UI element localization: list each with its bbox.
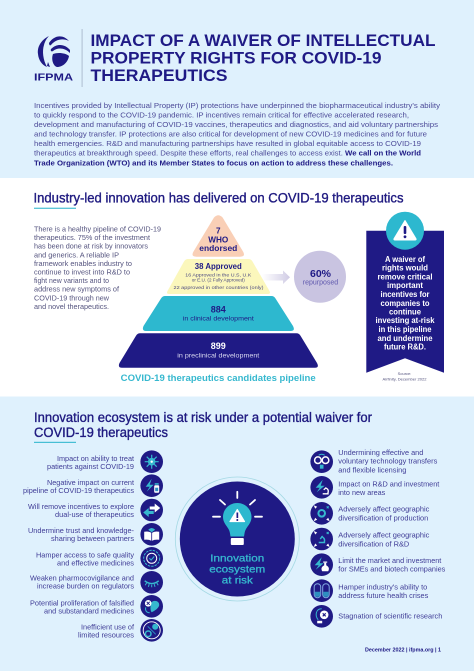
risk text: pharmacovigilance: Weaken pharmocovigilance and: [30, 573, 134, 582]
source note: [382, 371, 427, 382]
callout: 60% repurposed: 60%: [310, 268, 332, 280]
risk text: SMEs and biotech: for SMEs and biotech companies: [338, 565, 446, 574]
icon: technology transfer gears: [310, 450, 333, 473]
risk text: R&D investment: [338, 479, 439, 497]
logo wordmark: IFPMA: [34, 72, 73, 84]
risk text: dual-use: dual-use of therapeutics: [55, 510, 134, 519]
arrow: to repurposed: [262, 270, 290, 284]
banner text: companies to: [380, 299, 430, 308]
heading: industry-led innovation: Industry-led innovation has delivered on COVID-19 therapeutics: [34, 190, 404, 206]
intro text block: to quickly respond to the COVID-19 pandemic. IP incentives remain critical for effective accelerated research,: [34, 110, 409, 119]
banner text: incentives for: [380, 290, 430, 299]
risk text: health crises: address future health crises: [338, 591, 429, 600]
icon: lightning and microscope: [310, 476, 333, 499]
title: PROPERTY RIGHTS FOR COVID-19: [90, 48, 382, 67]
risk text: trust: Undermine trust and knowledge-: [28, 526, 135, 535]
pyramid tier: 884 in clinical development: [143, 296, 294, 331]
chart: therapeutics pipeline pyramid: [119, 215, 318, 384]
risk text: falsified medicines: and substandard medicines: [44, 607, 134, 616]
icon: virus: [140, 450, 163, 473]
footer: December 2022 | ifpma.org | 1: [365, 648, 441, 654]
hub label: at risk: [222, 574, 254, 586]
chart caption: COVID-19 therapeutics candidates pipeline: [121, 373, 316, 384]
risk text: production diversification: Adversely affect geographic: [338, 505, 430, 514]
intro text block: Incentives provided by Intellectual Property (IP) protections have underpinned the biopharmaceutical industry's ability: [34, 101, 440, 110]
pyramid tier: 38 approved: 16 Approved in the U.S, U.K: [185, 272, 252, 278]
risk text: scientific research: Stagnation of scientific research: [338, 612, 442, 621]
text block: pipeline paragraph: COVID-19 through new: [34, 293, 110, 302]
text block: pipeline paragraph: continue to invest into R&D to: [34, 268, 130, 277]
risk text: treat patients: patients against COVID-19: [47, 462, 134, 471]
risk text: limited resources: limited resources: [78, 631, 134, 640]
title: THERAPEUTICS: [90, 66, 228, 85]
heading: ecosystem at risk: Innovation ecosystem is at risk under a potential waiver for: [34, 410, 372, 425]
pyramid tier: 899 in preclinical development: 899: [211, 341, 226, 351]
icon: microscope with arrows: [310, 528, 333, 550]
pyramid tier: 899 in preclinical development: [119, 333, 318, 368]
icon: heart and stethoscope: [140, 595, 163, 618]
source note: Airfinity, December 2022: [382, 376, 427, 382]
icon: gear with arrows: [310, 502, 333, 525]
text block: pipeline paragraph: therapeutics. 75% of the investment: [34, 233, 151, 242]
pyramid tier: 38 approved: 22 approved in other countries (only): [174, 285, 264, 291]
icon: bulb with cross: [310, 605, 333, 628]
pyramid tier: 38 approved: [167, 259, 270, 294]
icon: closed eye: [140, 571, 163, 594]
risk text: technology transfers: Undermining effective and: [338, 448, 423, 457]
risk text: falsified medicines: [30, 599, 134, 616]
heading: ecosystem at risk: [34, 410, 372, 443]
text block: pipeline paragraph: framework enables industry to: [34, 259, 132, 268]
intro text block: health emergencies. R&D and manufacturing partnerships have resulted in global equitable access to COVID-19: [34, 139, 421, 148]
intro text block: Trade Organization (WTO) and its Member States to focus on action to address these challenges.: [34, 158, 393, 167]
pyramid tier: WHO endorsed: [192, 215, 244, 257]
pyramid tier: 38 approved: or E.U. (2 Fully Approved): [192, 278, 245, 284]
icon: capsules: [310, 579, 333, 602]
icon: exchange arrows: [140, 499, 163, 521]
text block: pipeline paragraph: and generics. A reliable IP: [34, 250, 119, 259]
risk text: trust: sharing between partners: [51, 534, 134, 543]
risk text: limited resources: [78, 622, 135, 640]
source note: Source:: [398, 371, 411, 376]
center hub: innovation ecosystem at risk: [175, 477, 299, 601]
risk text: falsified medicines: Potential proliferation of falsified: [30, 599, 134, 608]
pyramid tier: WHO endorsed: endorsed: [199, 244, 237, 253]
callout: 60% repurposed: repurposed: [303, 280, 338, 286]
risk text: technology transfers: [338, 448, 438, 474]
risk text: R&D investment: into new areas: [338, 488, 386, 497]
logo: IFPMA: [34, 36, 73, 84]
callout: 60% repurposed: [294, 251, 346, 303]
intro text block: [34, 101, 440, 167]
banner text: future R&D.: [384, 342, 426, 352]
risk text: safe medicines: Hamper access to safe quality: [36, 551, 134, 560]
risk text: R&D investment: Impact on R&D and investment: [338, 479, 439, 488]
icon: warning circle: [386, 212, 424, 250]
risk text: technology transfers: voluntary technology transfers: [338, 457, 438, 466]
banner text: important: [387, 281, 423, 290]
risk text: health crises: Hamper industry's ability to: [338, 582, 427, 591]
risk text: current pipeline: Negative impact on current: [47, 478, 134, 487]
text block: pipeline paragraph: fight new variants and to: [34, 276, 109, 285]
text block: pipeline paragraph: address new symptoms of: [34, 285, 120, 294]
icon: resources cycle: [140, 619, 163, 642]
left list: risks: [23, 450, 163, 642]
icon: open book: [140, 523, 163, 546]
text block: pipeline paragraph: There is a healthy pipeline of COVID-19: [34, 224, 161, 233]
banner text: A waiver of: [385, 255, 425, 264]
icon: quality badge: [140, 547, 163, 570]
pyramid tier: 884 in clinical development: 884: [211, 304, 226, 314]
intro text block: therapeutics at breakthrough speed. Despite these efforts, real challenges to access exist. We call on the World: [34, 149, 421, 158]
banner text: [376, 255, 435, 352]
icon: light bulb with warning: [213, 492, 262, 545]
pyramid tier: 38 approved: 38 Approved: [195, 261, 242, 271]
banner text: in this pipeline: [378, 325, 432, 334]
risk text: limited resources: Inefficient use of: [81, 622, 135, 631]
hub label: Innovation: [210, 552, 264, 564]
risk text: technology transfers: and flexible licensing: [338, 465, 406, 474]
risk text: current pipeline: pipeline of COVID-19 therapeutics: [23, 486, 134, 495]
panel: header: [0, 0, 474, 178]
banner text: continue: [389, 308, 422, 316]
right list: risks: [310, 448, 446, 628]
text block: pipeline paragraph: [34, 224, 161, 311]
text block: pipeline paragraph: and novel therapeutics.: [34, 302, 109, 311]
risk text: treat patients: Impact on ability to treat: [57, 454, 134, 463]
callout banner: waiver warning: [366, 212, 444, 373]
risk text: health crises: [338, 582, 429, 600]
risk text: SMEs and biotech: [338, 556, 446, 574]
risk text: R&D diversification: diversification of R&D: [338, 539, 409, 548]
pyramid tier: 899 in preclinical development: in preclinical development: [177, 352, 259, 359]
banner text: investing at-risk: [376, 316, 435, 325]
pyramid tier: 884 in clinical development: in clinical development: [183, 316, 254, 322]
hub label: ecosystem: [209, 564, 266, 576]
banner text: remove critical: [378, 272, 432, 282]
risk text: current pipeline: [23, 478, 134, 495]
panel: innovation ecosystem: [0, 396, 474, 671]
risk text: production diversification: diversification of production: [338, 513, 428, 522]
hub label: [209, 552, 266, 586]
title: [90, 31, 436, 85]
title: IMPACT OF A WAIVER OF INTELLECTUAL: [90, 31, 436, 50]
risk text: SMEs and biotech: Limit the market and investment: [338, 556, 441, 565]
pyramid tier: WHO endorsed: WHO: [208, 235, 229, 244]
risk text: pharmacovigilance: increase burden on regulators: [37, 582, 134, 591]
risk text: R&D diversification: [338, 531, 430, 548]
intro text block: and technology transfer. IP protections are also critical for development of new COVID-19 medicines and for future: [34, 130, 427, 139]
icon: lightning and flask: [310, 553, 333, 576]
heading: ecosystem at risk: COVID-19 therapeutics: [34, 425, 168, 440]
risk text: trust: [28, 526, 135, 543]
risk text: dual-use: [28, 502, 134, 519]
pyramid tier: WHO endorsed: 7: [216, 227, 221, 236]
icon: lightning and vial: [140, 474, 163, 497]
banner text: rights would: [382, 264, 428, 272]
risk text: pharmacovigilance: [30, 573, 134, 591]
risk text: safe medicines: [36, 551, 134, 568]
risk text: treat patients: [47, 454, 134, 471]
risk text: dual-use: Will remove incentives to explore: [28, 502, 134, 511]
risk text: R&D diversification: Adversely affect geographic: [338, 531, 430, 540]
risk text: safe medicines: and effective medicines: [57, 559, 134, 568]
intro text block: development and manufacturing of COVID-19 vaccines, therapeutics and diagnostics, and aid voluntary partnerships: [34, 120, 438, 129]
risk text: production diversification: [338, 505, 430, 522]
text block: pipeline paragraph: has been done at risk by innovators: [34, 242, 148, 251]
banner text: and undermine: [378, 334, 433, 343]
